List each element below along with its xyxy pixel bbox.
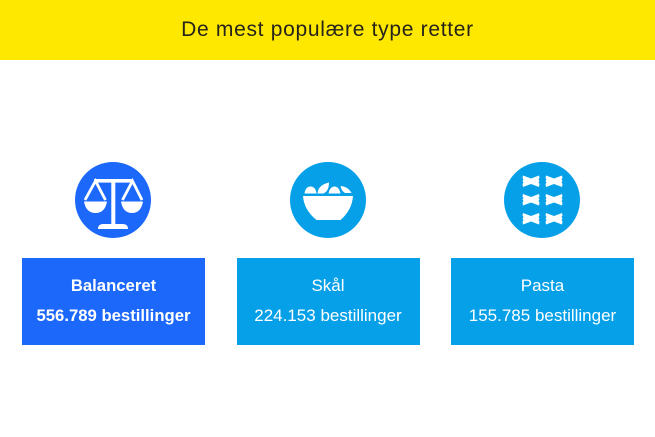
title: De mest populære type retter [181,18,474,41]
card label: Skål [311,276,345,294]
title banner [0,0,655,60]
card label: Pasta [521,276,564,295]
card value: 155.785 bestillinger [469,306,616,325]
card label: Balanceret [71,276,156,295]
card value: 556.789 bestillinger [36,306,190,325]
card value: 224.153 bestillinger [254,306,402,325]
card: Skål [236,258,420,344]
card: Balanceret [22,258,205,345]
icon: farfalle pasta [504,162,580,238]
card: Pasta [451,258,634,345]
icon: salad bowl [290,162,366,238]
icon: balance scale [75,162,151,238]
